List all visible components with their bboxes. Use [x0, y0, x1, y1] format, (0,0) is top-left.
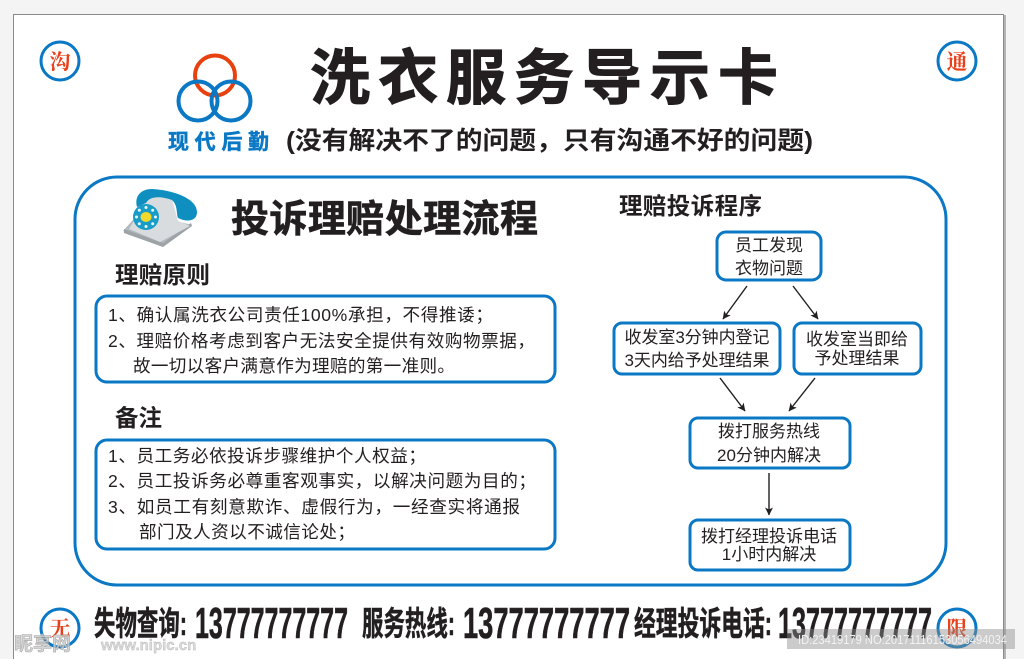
seal: top right	[938, 42, 976, 80]
seal: bottom right: 限	[946, 613, 968, 643]
box: manager	[690, 520, 850, 570]
box: hotline: 拨打服务热线	[718, 422, 820, 441]
box: hotline	[690, 418, 850, 468]
title: 洗衣服务导示卡	[310, 45, 778, 112]
box: discover: 衣物问题	[735, 259, 803, 278]
principle text	[108, 305, 535, 376]
box: manager: 1小时内解决	[722, 545, 816, 564]
footer contact line	[94, 599, 932, 648]
footer contact line: 13777777777	[463, 599, 630, 648]
footer contact line: 13777777777	[195, 599, 348, 648]
logo	[168, 56, 269, 154]
seal: top left	[41, 42, 79, 80]
box: discover: 员工发现	[735, 236, 803, 255]
box: manager: 拨打经理投诉电话	[701, 527, 837, 546]
box: hotline: 20分钟内解决	[717, 446, 821, 465]
subtitle: (没有解决不了的问题，只有沟通不好的问题)	[286, 127, 813, 155]
watermark: site: 昵享网	[14, 633, 71, 655]
box: discover	[717, 232, 821, 280]
principle text: 1、确认属洗衣公司责任100%承担，不得推诿；	[108, 305, 493, 325]
logo rings	[178, 56, 250, 120]
notes text: 2、员工投诉务必尊重客观事实，以解决问题为目的；	[108, 471, 536, 491]
notes text: 3、如员工有刻意欺诈、虚假行为，一经查实将通报	[108, 497, 520, 517]
footer contact line: 服务热线:	[362, 605, 455, 642]
notes text: 部门及人资以不诚信论处；	[139, 522, 355, 542]
notes text	[108, 446, 536, 542]
footer contact line: 经理投诉电话:	[634, 605, 772, 642]
logo name: 现代后勤	[168, 131, 269, 154]
heading: procedure: 理赔投诉程序	[619, 193, 762, 219]
heading: notes: 备注	[115, 405, 162, 431]
seal: bottom left	[41, 609, 79, 647]
icon: telephone	[123, 189, 197, 247]
flowchart	[614, 232, 921, 570]
box: 3 minutes: 收发室3分钟内登记	[624, 328, 770, 347]
notes text: 1、员工务必依投诉步骤维护个人权益；	[108, 446, 426, 466]
heading: principle: 理赔原则	[115, 262, 210, 288]
box: immediate: 予处理结果	[814, 349, 900, 368]
heading: process: 投诉理赔处理流程	[231, 199, 538, 241]
watermark: site: www.nipic.cn	[100, 637, 196, 654]
panel: principle	[96, 296, 555, 382]
seal: bottom left: 无	[50, 613, 70, 643]
box: immediate	[794, 323, 921, 374]
watermark: site	[14, 633, 196, 655]
panel: notes	[96, 440, 555, 549]
seal: top left: 沟	[50, 46, 70, 76]
arrows	[720, 286, 818, 515]
box: 3 minutes: 3天内给予处理结果	[624, 351, 770, 370]
principle text: 2、理赔价格考虑到客户无法安全提供有效购物票据，	[108, 331, 535, 351]
seal: top right: 通	[946, 46, 968, 76]
box: 3 minutes	[614, 323, 780, 374]
watermark: id	[787, 629, 1015, 649]
box: immediate: 收发室当即给	[806, 330, 908, 349]
principle text: 故一切以客户满意作为理赔的第一准则。	[133, 356, 455, 376]
seal: bottom right	[938, 609, 976, 647]
footer contact line: 失物查询:	[94, 605, 187, 642]
main panel	[75, 177, 946, 585]
